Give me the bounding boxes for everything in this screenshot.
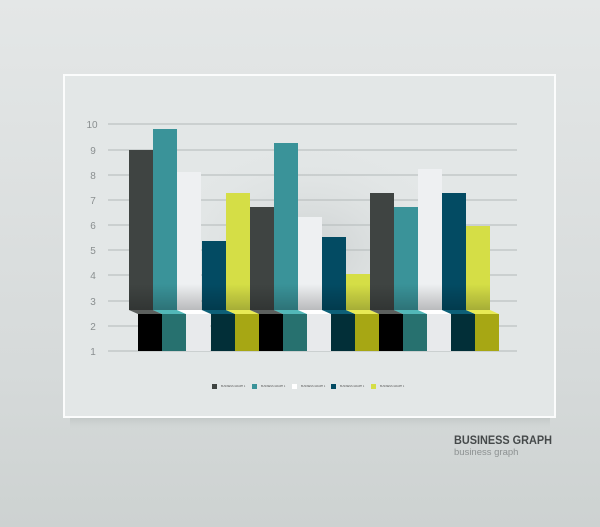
front blocks bbox=[138, 314, 499, 351]
legend bbox=[212, 384, 405, 389]
y axis labels and grid: 5 bbox=[90, 246, 96, 257]
y axis labels and grid: 9 bbox=[90, 146, 96, 157]
title: BUSINESS GRAPH bbox=[454, 433, 552, 447]
y axis labels and grid: 1 bbox=[90, 347, 96, 358]
title: business graph bbox=[454, 447, 518, 458]
legend: BUSINESS GRAPH 1 bbox=[340, 385, 365, 388]
y axis labels and grid bbox=[86, 120, 517, 358]
title bbox=[454, 433, 552, 458]
y axis labels and grid: 2 bbox=[90, 322, 96, 333]
legend: BUSINESS GRAPH 1 bbox=[221, 385, 246, 388]
y axis labels and grid: 6 bbox=[90, 221, 96, 232]
legend: BUSINESS GRAPH 1 bbox=[380, 385, 405, 388]
y axis labels and grid: 8 bbox=[90, 171, 96, 182]
legend: BUSINESS GRAPH 1 bbox=[301, 385, 326, 388]
y axis labels and grid: 3 bbox=[90, 297, 96, 308]
y axis labels and grid: 10 bbox=[86, 120, 98, 131]
frame panel bbox=[64, 75, 555, 430]
y axis labels and grid: 7 bbox=[90, 196, 96, 207]
y axis labels and grid: 4 bbox=[90, 271, 96, 282]
top faces bbox=[129, 310, 499, 314]
bar chart bbox=[129, 129, 499, 351]
legend: BUSINESS GRAPH 1 bbox=[261, 385, 286, 388]
